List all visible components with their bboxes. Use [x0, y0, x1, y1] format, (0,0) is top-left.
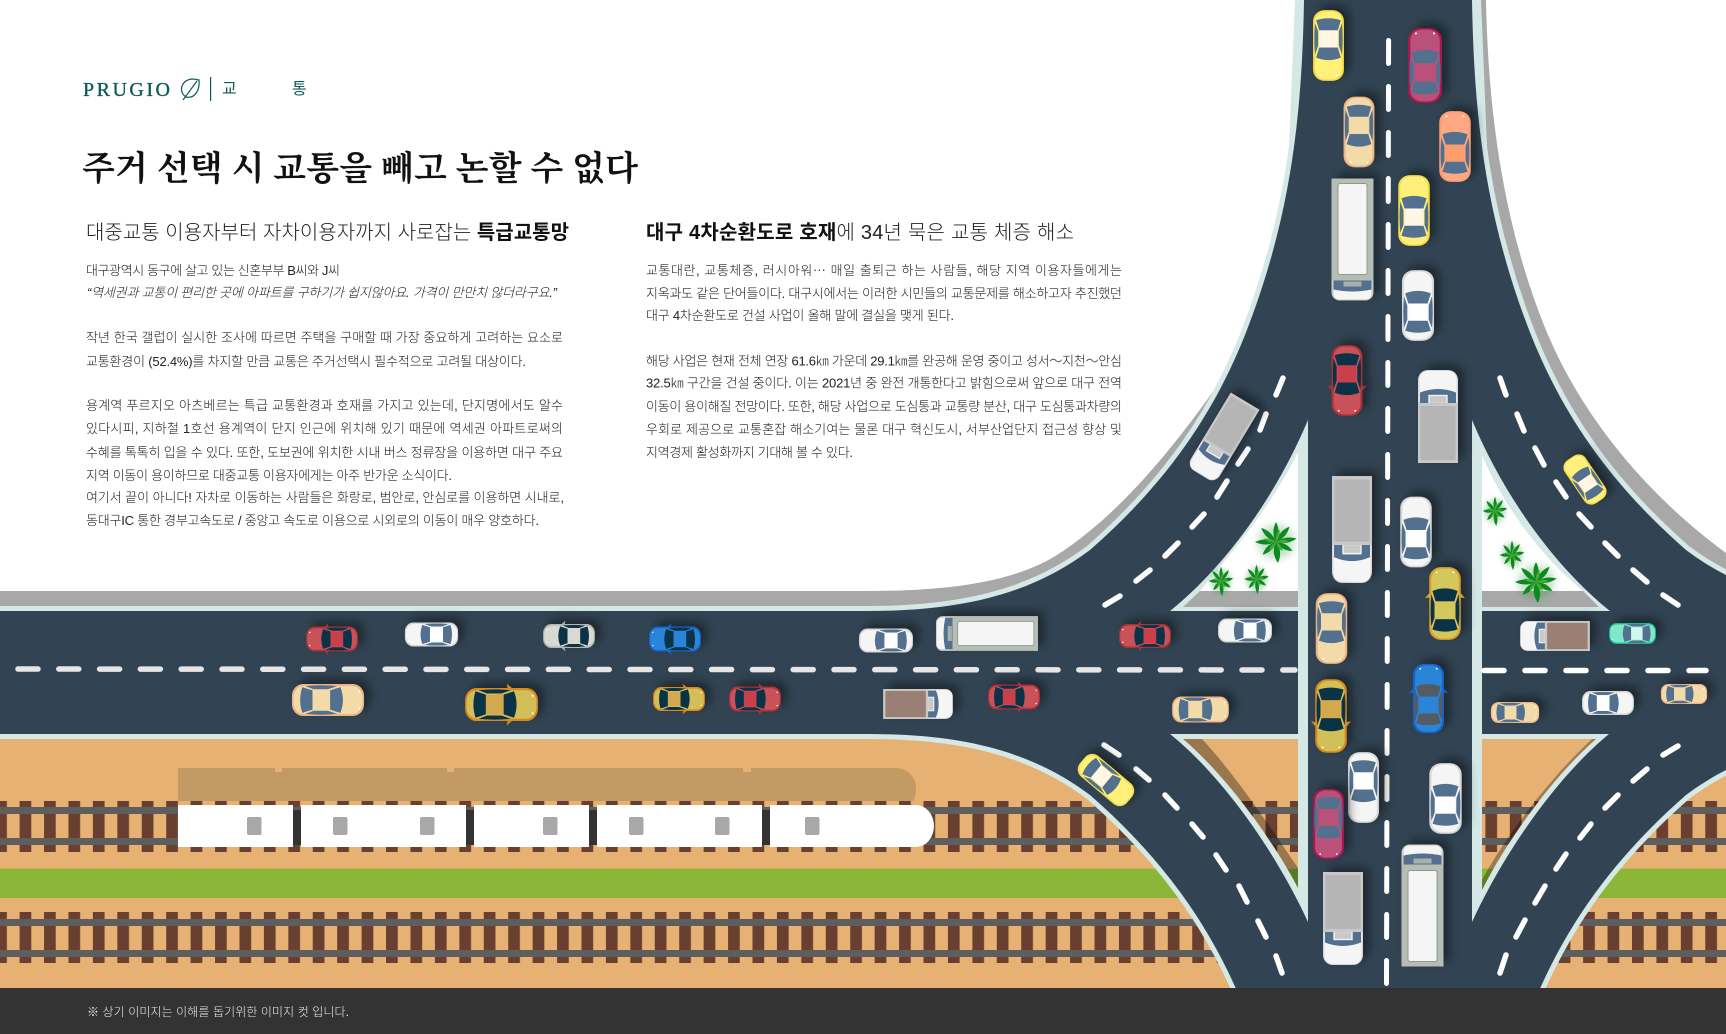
palm trees	[1209, 497, 1557, 603]
column 2 text: 이동이 용이해질 전망이다. 또한, 해당 사업으로 도심통과 교통량 분산, 대구 도심통과차량의	[646, 399, 1122, 414]
car: red horizontal	[988, 681, 1040, 713]
train shadow	[178, 768, 916, 801]
column 2 text: 지옥과도 같은 단어들이다. 대구시에서는 이러한 시민들의 교통문제를 해소하고자 추진했던	[646, 286, 1122, 301]
gray sidewalk left	[0, 370, 1270, 650]
footer note: ※ 상기 이미지는 이해를 돕기위한 이미지 컷 입니다.	[87, 1005, 349, 1019]
column 1 text: 대구광역시 동구에 살고 있는 신혼부부 B씨와 J씨	[86, 263, 340, 278]
car: small gold horizontal	[653, 684, 705, 714]
railway tracks, sand and grass	[0, 738, 1726, 988]
car: peach	[1339, 97, 1379, 167]
car: red horizontal	[1119, 621, 1171, 651]
car: olive	[1425, 567, 1465, 640]
car: yellow	[1394, 175, 1434, 246]
logo: PRUGIO 교통: PRUGIO	[83, 79, 170, 101]
car: yellow angled lower ramp	[1071, 747, 1141, 813]
car: red horizontal	[306, 623, 358, 655]
column 2 text: 32.5㎞ 구간을 건설 중이다. 이는 2021년 중 완전 개통한다고 밝힘으로써 앞으로 대구 전역	[646, 376, 1122, 390]
truck: long white trailer bottom	[1402, 844, 1444, 966]
column 2 text: 우회로 제공으로 교통혼잡 해소기여는 물론 대구 혁신도시, 서부산업단지 접근성 향상 및	[646, 422, 1122, 437]
column 1 text: 용계역 푸르지오 아츠베르는 특급 교통환경과 호재를 가지고 있는데, 단지명에서도 알수	[86, 398, 563, 413]
median strips	[1298, 420, 1482, 922]
column 2 text: 지역경제 활성화까지 기대해 볼 수 있다.	[646, 445, 853, 460]
car: blue	[1409, 664, 1448, 733]
lane dashes: horizontal left	[18, 669, 1295, 670]
column 1 text: 작년 한국 갤럽이 실시한 조사에 따르면 주택을 구매할 때 가장 중요하게 고려하는 요소로	[86, 330, 563, 345]
logo: PRUGIO 교통: 교	[222, 81, 237, 98]
column 2 text: 대구 4차순환도로 건설 사업이 올해 말에 결실을 맺게 된다.	[646, 308, 954, 323]
car: peach horizontal	[292, 680, 364, 720]
car: white right	[1582, 688, 1634, 718]
column 1 text	[86, 263, 564, 528]
car: gold horizontal	[465, 684, 538, 725]
car: yellow top lane	[1309, 10, 1348, 81]
car: crimson	[1404, 28, 1446, 103]
car: peach right	[1491, 699, 1539, 726]
car: white horizontal	[405, 619, 458, 650]
car: crimson	[1309, 789, 1348, 859]
car: white horizontal	[859, 625, 913, 656]
lane dashes: center vertical	[1386, 40, 1389, 984]
truck: white trailer horizontal	[936, 616, 1038, 651]
car: yellow angled on ramp	[1557, 449, 1613, 510]
column 1 text: 수혜를 톡톡히 입을 수 있다. 또한, 도보권에 위치한 시내 버스 정류장을 이용하면 대구 주요	[86, 445, 563, 460]
truck: brown cargo right	[1520, 621, 1590, 651]
column 2 text	[646, 263, 1122, 460]
truck: long white trailer	[1332, 178, 1374, 300]
car: white	[1344, 752, 1383, 823]
column 1 text: “역세권과 교통이 편리한 곳에 아파트를 구하기가 쉽지않아요. 가격이 만만치 않더라구요.”	[87, 285, 558, 300]
lane dashes: ramps	[1104, 378, 1678, 973]
column 2 heading: 대구 4차순환도로 호재에 34년 묵은 교통 체증 해소	[646, 221, 1074, 244]
road island: lower left and lower right	[1170, 734, 1609, 922]
column 2 text: 해당 사업은 현재 전체 연장 61.6㎞ 가운데 29.1㎞를 완공해 운영 중이고 성서～지천～안심	[646, 354, 1122, 368]
car: peach far right	[1661, 681, 1707, 707]
title: 주거 선택 시 교통을 빼고 논할 수 없다	[82, 150, 638, 188]
logo: PRUGIO 교통: 통	[292, 80, 307, 98]
car: teal	[1609, 620, 1656, 647]
column 1 text: 여기서 끝이 아니다! 자차로 이동하는 사람들은 화랑로, 범안로, 안심로를 이용하면 시내로,	[86, 490, 564, 505]
truck: gray cargo lower	[1332, 476, 1372, 583]
car: gold	[1311, 679, 1351, 753]
car: gray horizontal	[543, 621, 595, 651]
car: orange	[1435, 111, 1475, 182]
car: red horizontal	[729, 683, 781, 715]
column 2 text: 교통대란, 교통체증, 러시아워⋯ 매일 출퇴근 하는 사람들, 해당 지역 이용자들에게는	[646, 263, 1122, 278]
truck: gray cargo	[1418, 370, 1458, 463]
logo: PRUGIO 교통	[83, 77, 307, 101]
gray sidewalk right	[1400, 0, 1726, 650]
road island: upper right	[1472, 420, 1610, 611]
car: white horizontal	[1218, 615, 1272, 646]
truck: brown cargo horizontal	[883, 689, 953, 719]
column 1 text: 있다시피, 지하철 1호선 용계역이 단지 인근에 위치해 있기 때문에 역세권 아파트로써의	[86, 421, 563, 436]
car: white	[1425, 763, 1466, 834]
column 1 text: 동대구IC 통한 경부고속도로 / 중앙고 속도로 이용으로 시외로의 이동이 매우 양호하다.	[86, 513, 539, 528]
column 1 text: 지역 이동이 용이하므로 대중교통 이용자에게는 아주 반가운 소식이다.	[86, 468, 452, 483]
car: white	[1398, 270, 1438, 341]
car: red	[1327, 345, 1367, 416]
lane dashes: horizontal right	[1484, 668, 1706, 673]
road island: upper left	[1170, 420, 1308, 611]
car: peach	[1312, 593, 1351, 664]
footer bar	[0, 988, 1726, 1034]
column 1 heading: 대중교통 이용자부터 자차이용자까지 사로잡는 특급교통망	[86, 221, 569, 244]
truck: gray cargo bottom	[1323, 872, 1363, 965]
car: peach horizontal	[1172, 693, 1229, 726]
car: white	[1396, 497, 1436, 567]
column 1 text: 교통환경이 (52.4%)를 차지할 만큼 교통은 주거선택시 필수적으로 고려될 대상이다.	[86, 354, 526, 369]
car: blue horizontal	[649, 623, 701, 655]
train	[178, 805, 934, 847]
truck: gray angled on ramp	[1186, 392, 1260, 484]
